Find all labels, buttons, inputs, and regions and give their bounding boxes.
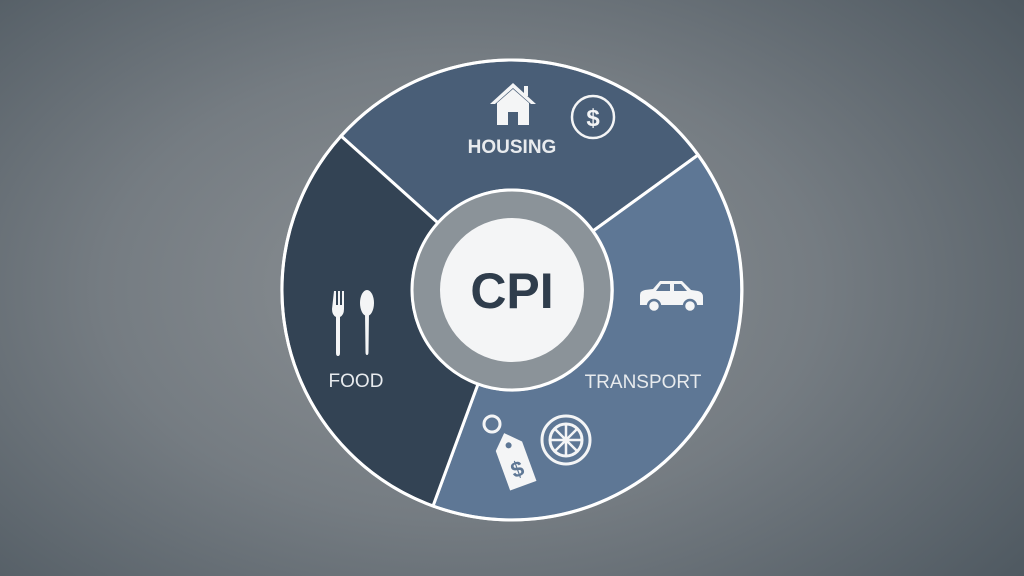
icon: wheel [542, 416, 590, 464]
icon: dollar coin [572, 96, 614, 138]
label: housing: HOUSING [468, 137, 556, 158]
label: transport: TRANSPORT [585, 372, 702, 393]
icon: dollar coin: $ [586, 105, 600, 132]
icon: car [640, 281, 703, 312]
segment: transport [433, 155, 742, 520]
icon: house [490, 83, 536, 125]
icon: fork and spoon [332, 290, 374, 356]
icon: price tag: $ [507, 455, 527, 483]
label: food: FOOD [329, 371, 383, 392]
center hub [412, 190, 612, 390]
icon: price tag [484, 416, 536, 491]
outer ring outline [282, 60, 742, 520]
segment: housing [341, 60, 698, 231]
segment: food [282, 136, 478, 506]
center label: CPI: CPI [470, 263, 554, 319]
